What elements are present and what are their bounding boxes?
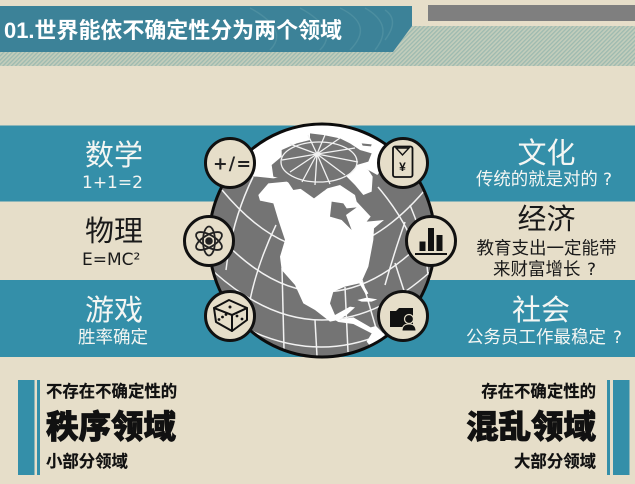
header banner [0,6,412,52]
northern cap [252,126,384,178]
left label: games: 胜率确定 [78,327,148,347]
left label: physics: 物理 [85,215,143,248]
right label: culture: 文化 [517,137,576,170]
arctic island strip [362,143,372,146]
hudson bay [330,202,357,230]
greenland [347,165,373,195]
left label: mathematics: 数学 [85,139,143,172]
icon: plus divide equals: +/= [213,154,251,174]
left label: mathematics [82,139,143,193]
left legend: order domain: 不存在不确定性的 [46,382,177,401]
right legend: chaos domain [466,380,630,475]
right label: economy: 教育支出一定能带 [476,238,616,258]
left label: physics [82,215,143,270]
right label: society: 社会 [512,294,570,327]
right label: economy [476,203,616,280]
central america [335,317,385,347]
band: bottom teal [0,280,635,357]
right legend: chaos domain: 大部分领域 [514,452,597,471]
right legend: chaos domain: 存在不确定性的 [481,382,596,401]
left legend: order domain: 秩序领域 [46,409,177,445]
icon: atom [184,216,234,266]
right label: culture [476,137,612,190]
north america [258,182,384,322]
icon: phone with yen: ¥ [399,160,406,174]
left label: games [78,294,148,347]
grid lines [214,177,432,356]
title: 01.世界能依不确定性分为两个领域 [4,18,342,43]
hatched header strip [0,26,635,66]
right legend: chaos domain: 混乱领域 [466,409,596,445]
right label: culture: ? [603,170,612,190]
icon: bar chart [406,216,456,266]
right label: economy: 经济 [517,203,576,236]
band: top teal [0,126,635,202]
icon: folder with person [378,292,428,340]
left label: games: 游戏 [85,294,143,327]
left legend: order domain: 小部分领域 [46,452,129,471]
land masses [252,126,385,345]
right label: society [466,294,622,348]
icon: plus divide equals [206,138,254,188]
right label: economy: 来财富增长 [493,259,580,279]
right label: economy: ? [587,260,596,280]
globe outline [209,124,435,357]
arctic grid [281,135,358,185]
right label: society: ? [613,328,622,348]
left label: physics: E=MC² [82,250,140,270]
cuba [357,298,377,302]
icon: dice [206,292,254,340]
header gray bar [428,5,635,21]
right label: society: 公务员工作最稳定 [466,327,606,347]
icon: phone with yen [378,138,428,188]
right label: culture: 传统的就是对的 [476,169,598,189]
globe [209,120,435,357]
left label: mathematics: 1+1=2 [82,173,143,193]
arctic ocean [272,133,372,196]
left legend: order domain [18,380,177,475]
